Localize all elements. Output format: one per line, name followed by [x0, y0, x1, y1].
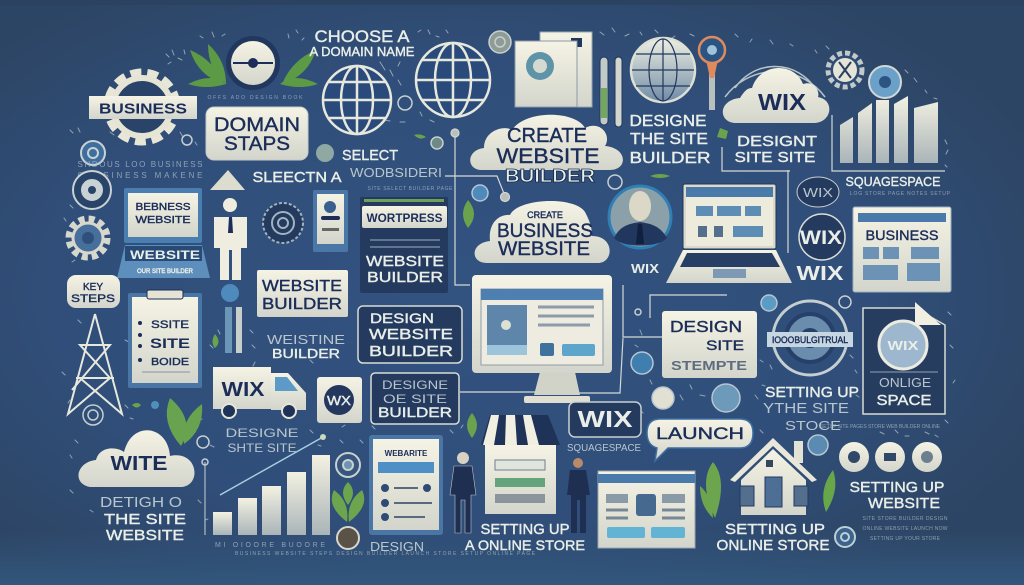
- callout: create business website cloud: WEBSITE: [498, 239, 590, 260]
- panel: design website builder: WEBSITE: [369, 326, 453, 343]
- icon: pens: [600, 57, 622, 127]
- callout: launch bubble: [647, 419, 753, 461]
- icon: laptop business website: OUR SITE BUILDER: [137, 269, 194, 275]
- text: designe the site: DESIGNE: [226, 426, 298, 440]
- icon: phone: [313, 190, 348, 252]
- panel: wix document: ONLIGE: [879, 375, 931, 390]
- small background captions: SETUP SITE PAGES STORE WEB BUILDER ONLINE: [820, 424, 941, 430]
- icon: radio tower: [68, 314, 122, 414]
- callout: launch bubble: LAUNCH: [656, 424, 744, 443]
- icon: medal: [337, 527, 359, 549]
- small background captions: OFFS ADO DESIGN BOOK: [208, 95, 303, 101]
- icon: clipboard: BOIDE: [151, 357, 189, 368]
- panel: website builder: [257, 270, 348, 317]
- callout: wix cloud: [723, 67, 829, 123]
- panel: business page: BUSINESS: [866, 227, 938, 243]
- panel: business page: [853, 207, 951, 292]
- heading: choose a domain name: [310, 27, 415, 59]
- icon: storefront: [481, 415, 560, 514]
- icon: three round buttons: [839, 442, 942, 472]
- callout: wix cloud: WIX: [758, 89, 807, 115]
- panel: website builder: BUILDER: [262, 296, 342, 313]
- text: select a website builder: SLEECTN A: [252, 169, 342, 186]
- panel: design site sign: [662, 311, 757, 378]
- panel: wordpress website builder: WEBSITE: [366, 253, 444, 270]
- text: design the site website: WEBSITE: [106, 527, 184, 544]
- panel: domain steps: [206, 107, 308, 160]
- icon: magnifier: [699, 37, 725, 110]
- icon: person: [214, 198, 247, 280]
- text: select a website builder: SELECT: [342, 147, 398, 164]
- panel: wix document: WIX: [888, 338, 919, 353]
- icon: cloud wite: [79, 430, 194, 487]
- text: setting up website: WEBSITE: [868, 495, 940, 512]
- icon: ring with band: IOOOBULGITRUAL: [772, 335, 848, 345]
- panel: designe site builder: DESIGNE: [382, 378, 448, 392]
- panel: wix dark label: WIX: [578, 406, 633, 432]
- icon: wix square: WX: [327, 393, 351, 408]
- icon: circle badge: [336, 453, 360, 477]
- panel: design site sign: SITE: [706, 337, 744, 353]
- connector lines: [445, 115, 945, 393]
- scattered specks: [62, 28, 955, 520]
- text: design the site website: THE SITE: [104, 511, 186, 528]
- panel: wordpress website builder: WORTPRESS: [366, 211, 442, 225]
- icon: house: [730, 438, 817, 515]
- text: squarespace: SQUAGESPACE: [567, 443, 641, 454]
- panel: key steps: STEPS: [71, 293, 115, 305]
- text: designe the site: SHTE SITE: [228, 441, 296, 455]
- icon: tablet: WEBARITE: [385, 449, 428, 458]
- icon: globe small: [323, 66, 391, 134]
- panel: design site sign: STEMPTE: [671, 358, 747, 373]
- panel: design website builder: [358, 306, 462, 363]
- bar chart: MI OIOORE BUOORE: [215, 542, 325, 549]
- icon: ring with band: [767, 301, 853, 375]
- bar chart: columns: [840, 96, 938, 163]
- small background captions: SITE SELECT BUILDER PAGE: [368, 186, 453, 192]
- icon: person standing: [450, 452, 476, 533]
- icon: small blue circles: [472, 185, 828, 455]
- panel: wix document: [863, 302, 945, 414]
- callout: create website builder cloud: BUILDER: [505, 166, 595, 186]
- panel: designe site builder: BUILDER: [378, 404, 452, 420]
- icon: globe three: [631, 38, 695, 102]
- icon: leaf left: [700, 462, 721, 518]
- icon: wix oval: [797, 177, 839, 207]
- icon: globe large: [416, 43, 490, 117]
- text: website builder caption: BUILDER: [272, 346, 340, 361]
- panel: domain steps: DOMAIN: [214, 115, 300, 136]
- text: select a website builder: [252, 147, 442, 186]
- icon: sprout: [332, 482, 364, 522]
- icon: clipboard: SITE: [150, 335, 190, 351]
- text: setting up a online store: A ONLINE STORE: [465, 538, 585, 553]
- text: squarespace label: SQUAGESPACE: [846, 174, 941, 189]
- icon: person in black: [567, 458, 590, 533]
- icon: target dial: [263, 203, 303, 243]
- panel: designe site builder: OE SITE: [383, 392, 447, 406]
- panel: wordpress website builder: BUILDER: [367, 269, 443, 286]
- text: design: DESIGN: [370, 539, 424, 554]
- panel: design website builder: BUILDER: [369, 343, 453, 360]
- icon: small green marks: [132, 128, 728, 438]
- icon: wix oval: WIX: [803, 185, 833, 200]
- text: designt site site: DESIGNT: [737, 133, 817, 150]
- icon: laptop business website: [117, 188, 210, 278]
- icon: clipboard: [128, 290, 202, 388]
- icon: document stack: [515, 32, 592, 107]
- text: setting up the site store: [763, 385, 859, 433]
- icon: person portrait: [609, 186, 671, 248]
- icon: small circle badge: [81, 141, 105, 165]
- text: wix small: WIX: [631, 261, 659, 276]
- icon: desktop monitor: [472, 275, 612, 403]
- text: select a website builder: WODBSIDERI: [350, 165, 442, 180]
- small background captions: ONLINE WEBSITE LAUNCH NOW: [862, 526, 948, 532]
- text: design the site website: DETIGH O: [100, 494, 182, 511]
- small background captions: [208, 95, 951, 557]
- text: setting up online store: [716, 521, 830, 554]
- icon: small accent badges: [83, 31, 851, 465]
- icon: laptop business website: WEBSITE: [130, 248, 200, 262]
- icon: wix square: [317, 377, 362, 423]
- text: website builder caption: WEISTINE: [267, 332, 345, 347]
- panel: domain steps: STAPS: [224, 134, 290, 155]
- text: setting up a online store: [465, 522, 585, 553]
- icon: laptop business website: WEBSITE: [136, 215, 191, 226]
- small background captions: SITE STORE BUILDER DESIGN: [862, 516, 948, 522]
- panel: key steps: KEY: [83, 282, 103, 293]
- icon: wix truck: [213, 367, 306, 418]
- text: designe the site builder: THE SITE: [630, 131, 708, 148]
- heading: choose a domain name: CHOOSE A: [314, 27, 410, 46]
- icon: gear with business label: [89, 72, 197, 142]
- text: designe the site builder: BUILDER: [630, 150, 710, 167]
- icon: leaf right: [823, 470, 835, 512]
- small background captions: BUSINESS WEBSITE STEPS DESIGN BUILDER LAUNCH STORE SETUP ONLINE PAGE: [235, 551, 536, 557]
- icon: wix truck: WIX: [222, 379, 265, 401]
- panel: wix dark label: [569, 402, 641, 437]
- callout: create business website cloud: [475, 201, 610, 263]
- icon: leaves: [167, 398, 202, 446]
- text: designt site site: SITE SITE: [734, 149, 816, 166]
- icon: clipboard: SSITE: [151, 319, 189, 331]
- icon: browser window: [598, 471, 695, 548]
- text: setting up a online store: SETTING UP: [480, 522, 570, 538]
- panel: design site sign: DESIGN: [670, 319, 742, 336]
- text: website builder caption: [267, 332, 345, 361]
- icon: blue circle: [869, 66, 901, 98]
- callout: create website builder cloud: [470, 115, 623, 186]
- icon: envelope: [210, 170, 245, 190]
- icon: gear left: [69, 219, 107, 257]
- bar chart: [205, 434, 330, 549]
- icon: gear x: [828, 53, 862, 87]
- callout: create website builder cloud: CREATE: [507, 125, 587, 147]
- text: designt site site: [734, 133, 817, 166]
- text: small caption: [78, 160, 202, 180]
- callout: create website builder cloud: WEBSITE: [496, 145, 600, 168]
- text: designe the site: [226, 426, 298, 455]
- text: setting up website: SETTING UP: [850, 479, 944, 496]
- panel: key steps: [67, 275, 120, 308]
- icon: rods: [221, 284, 242, 353]
- icon: laptop business website: BEBNESS: [136, 202, 191, 213]
- icon: compass with leaves: [188, 36, 318, 90]
- text: setting up the site store: SETTING UP: [765, 385, 859, 401]
- panel: website builder: WEBSITE: [262, 278, 342, 295]
- text: designe the site builder: DESIGNE: [630, 113, 706, 130]
- text: small caption: SHDOUS LOO BUSINESS: [78, 160, 202, 169]
- text: designe the site builder: [630, 113, 710, 167]
- icon: laptop: [666, 184, 792, 283]
- callout: create business website cloud: BUSINESS: [497, 221, 593, 242]
- text: setting up the site store: YTHE SITE: [763, 401, 849, 417]
- small background captions: LOG STORE PAGE NOTES SETUP: [850, 191, 951, 197]
- callout: create business website cloud: CREATE: [527, 210, 563, 220]
- text: design the site website: [100, 494, 186, 544]
- text: setting up online store: SETTING UP: [725, 521, 825, 538]
- icon: cloud wite: WITE: [110, 453, 168, 475]
- icon: wix circle: [799, 214, 845, 260]
- small background captions: SETTING UP YOUR STORE: [870, 536, 941, 542]
- text: setting up online store: ONLINE STORE: [716, 537, 830, 554]
- panel: designe site builder: [371, 373, 459, 424]
- text: setting up website: [850, 479, 944, 512]
- icon: ring badge: [73, 171, 111, 209]
- icon: small badge bottom: [835, 527, 855, 547]
- text: small caption: OBUSINESS MAKENE: [78, 171, 202, 180]
- panel: wix document: SPACE: [876, 392, 932, 409]
- icon: wix circle: WIX: [800, 228, 842, 249]
- icon: gear with business label: BUSINESS: [99, 100, 187, 118]
- text: setting up the site store: STOCE: [785, 418, 841, 433]
- panel: wordpress website builder: [360, 197, 448, 293]
- icon: tablet: [369, 435, 443, 535]
- panel: design website builder: DESIGN: [370, 310, 434, 326]
- text: wix: WIX: [796, 263, 844, 285]
- heading: choose a domain name: A DOMAIN NAME: [310, 44, 415, 59]
